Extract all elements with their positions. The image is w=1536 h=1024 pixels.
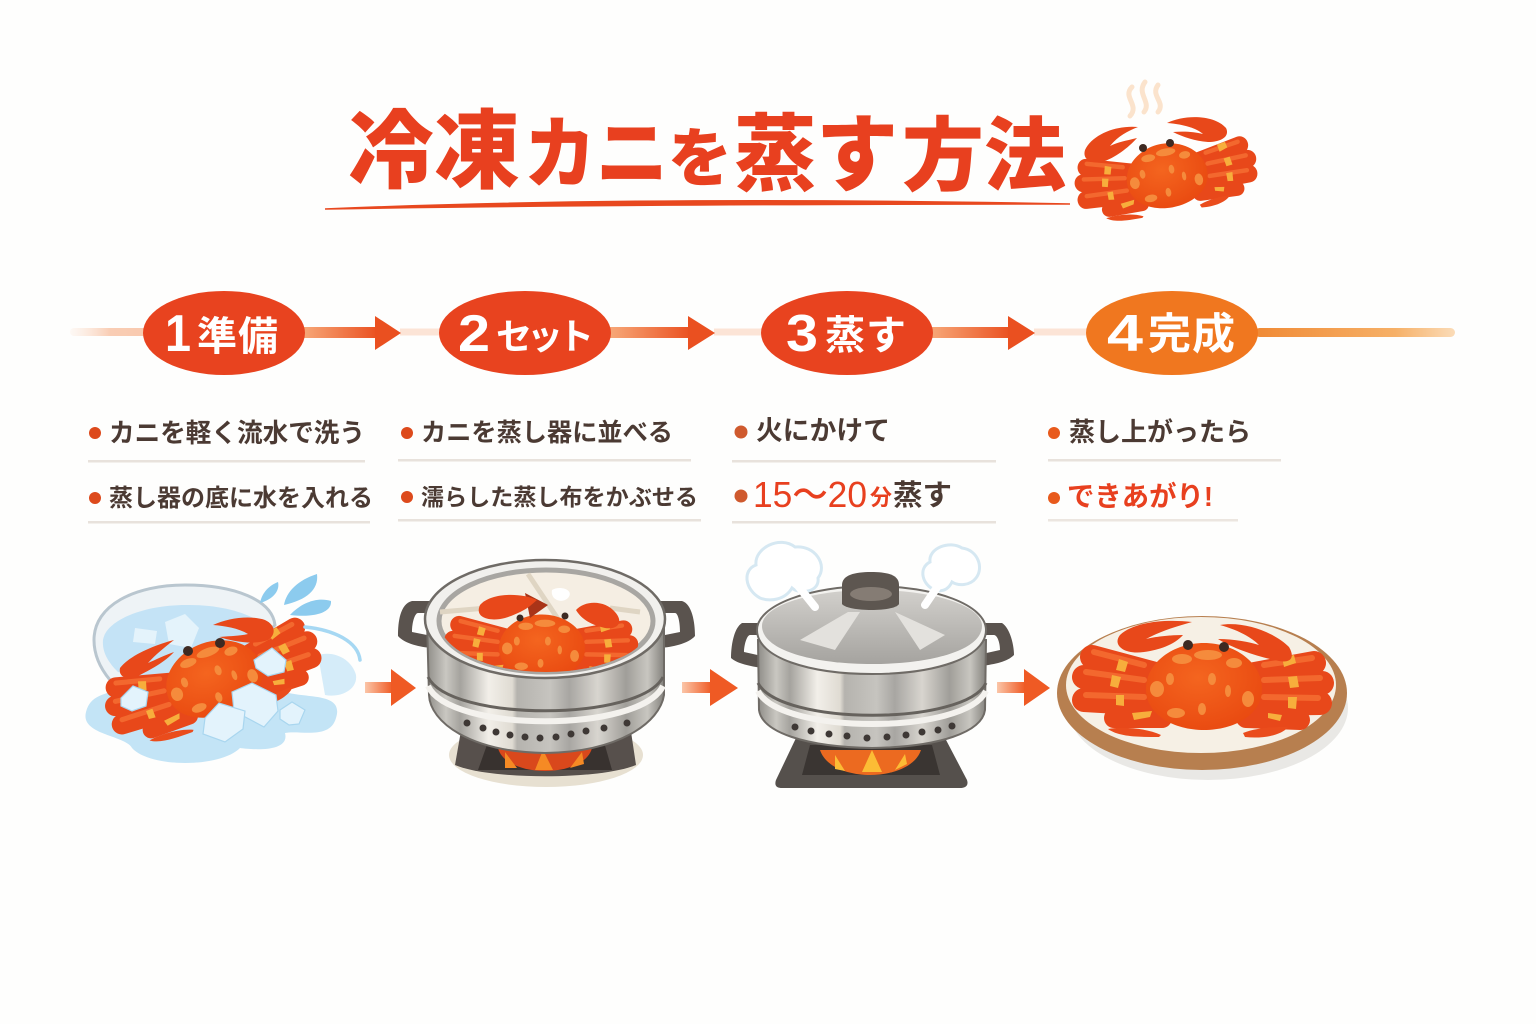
handles [731, 623, 1014, 668]
title: 方法 [902, 112, 1066, 201]
water splashes [260, 574, 331, 616]
step 2 list: 濡らした蒸し布をかぶせる [421, 484, 698, 510]
crab in steamer [453, 588, 629, 684]
lid knob [842, 572, 899, 610]
pot rim and cloth [425, 560, 665, 678]
steam clouds [747, 542, 980, 600]
illustration: crab on plate [1057, 616, 1348, 780]
step 2 badge [439, 291, 611, 375]
crab on plate [1084, 621, 1322, 738]
title: 冷凍 [348, 104, 520, 200]
step 1 badge: 1 [165, 305, 191, 363]
stove [775, 738, 968, 788]
flame [820, 750, 921, 775]
arrow: step 1 to 2 [303, 316, 401, 350]
timeline line [70, 328, 150, 336]
step 1 list [88, 418, 373, 524]
step 4 list [1048, 417, 1281, 522]
title: カニ [524, 110, 668, 198]
plate shadow [1068, 636, 1348, 780]
step 3 list: 分 [870, 485, 892, 510]
arrow: image 3 to 4 [997, 669, 1050, 706]
step 1 badge: 準備 [197, 315, 278, 359]
pot body [758, 640, 986, 748]
plate [1057, 616, 1347, 770]
step 4 badge [1086, 291, 1258, 375]
step 4 badge: 完成 [1148, 311, 1235, 359]
ice cubes [121, 648, 305, 742]
illustration: crab rinsed in ice water [85, 574, 360, 763]
bowl [94, 585, 275, 700]
step 4 badge: 4 [1107, 305, 1143, 363]
burner [455, 725, 636, 776]
title: を [668, 123, 732, 195]
title [325, 104, 1070, 209]
arrow: step 2 to 3 [610, 316, 715, 350]
step 1 list: カニを軽く流水で洗う [109, 418, 365, 448]
step 1 badge [143, 291, 305, 375]
splash pool [318, 654, 356, 696]
step 3 badge: 3 [786, 305, 818, 363]
step 3 list: 火にかけて [756, 416, 890, 446]
step 3 list [732, 416, 996, 524]
step 3 badge [761, 291, 933, 375]
claws [120, 640, 174, 678]
arrow: image 2 to 3 [682, 669, 738, 706]
step 3 list: 15〜20 [753, 474, 867, 515]
pot body [427, 620, 664, 753]
step 3 list: 蒸す [893, 479, 952, 512]
flame [498, 748, 592, 771]
step 2 badge: 2 [458, 305, 490, 363]
step 1 list: 蒸し器の底に水を入れる [109, 485, 373, 512]
vent holes [464, 720, 630, 742]
handles [398, 601, 695, 648]
timeline end [1255, 328, 1455, 337]
step 2 list [398, 419, 701, 522]
step 4 list: 蒸し上がったら [1069, 417, 1251, 447]
water puddle [85, 690, 337, 763]
step 3 badge: 蒸す [825, 314, 906, 358]
illustration: covered steamer on stove [731, 542, 1014, 788]
vent holes [792, 722, 956, 742]
burner shadow [449, 723, 643, 787]
arrow: step 3 to 4 [931, 316, 1035, 350]
pot band [428, 677, 663, 711]
icon: steaming crab [1079, 82, 1255, 227]
lid [757, 586, 986, 674]
title underline [325, 201, 1070, 209]
timeline segment [400, 328, 1090, 336]
title: 蒸す [734, 108, 898, 202]
arrow: image 1 to 2 [365, 669, 416, 706]
step 2 badge: セット [496, 316, 594, 357]
step 4 list: できあがり! [1067, 480, 1213, 512]
illustration: steamer with crab [398, 560, 695, 787]
step 2 list: カニを蒸し器に並べる [421, 419, 673, 447]
steam wisps [795, 580, 942, 607]
